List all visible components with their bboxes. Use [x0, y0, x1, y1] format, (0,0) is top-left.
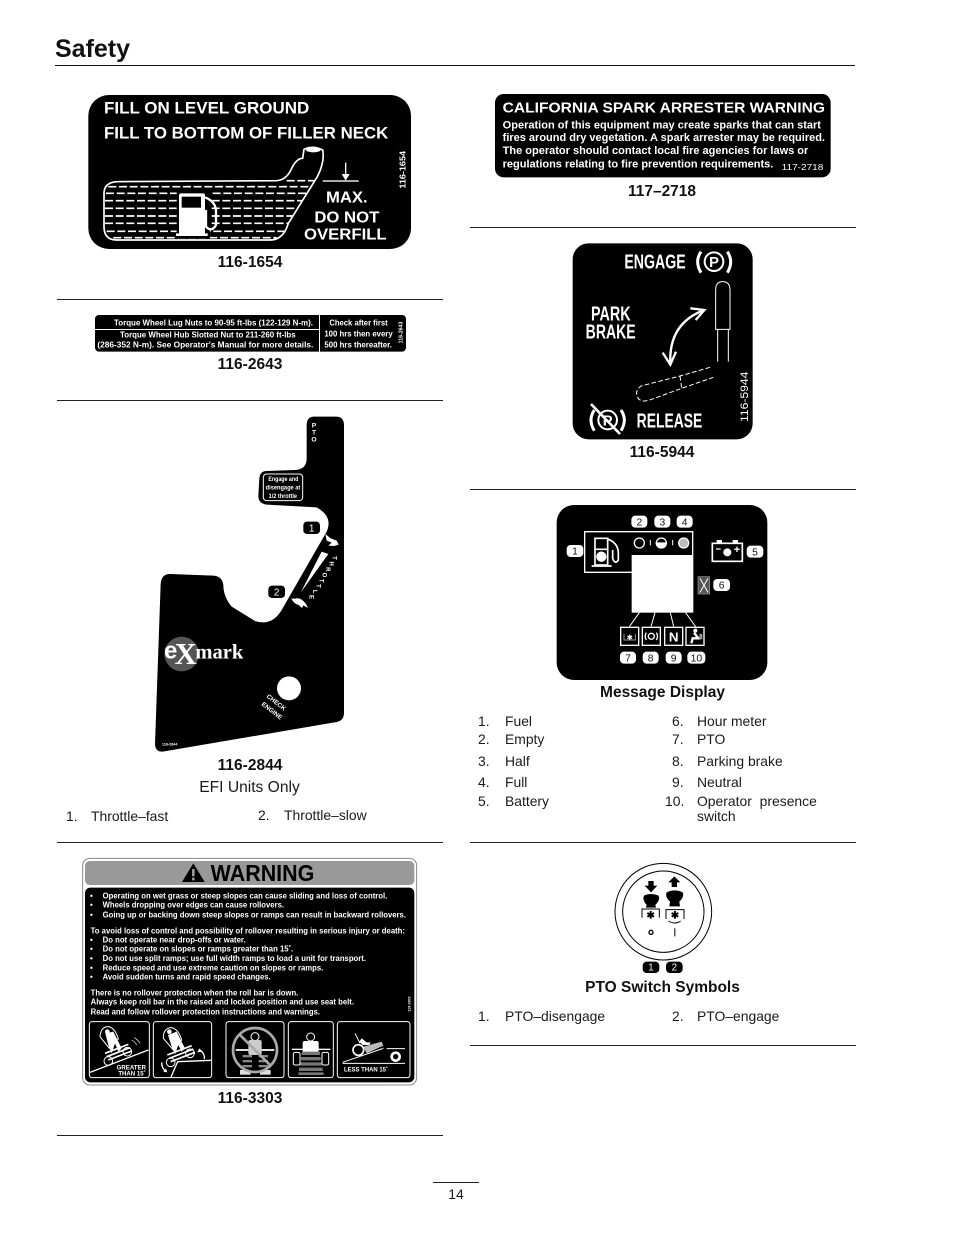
warning text panel: Always keep roll bar in the raised and locked position and use seat belt.	[91, 998, 354, 1007]
icon: fuel pump	[592, 538, 618, 566]
caption: 116-5944	[630, 444, 695, 461]
legend: message display right: Hour meter	[697, 713, 767, 729]
leader lines	[629, 613, 696, 627]
decal: fill on level ground 116-1654: OVERFILL	[304, 226, 387, 243]
logo: exmark: X	[175, 637, 197, 671]
warning text panel: To avoid loss of control and possibility of rollover resulting in serious injury or death:	[91, 926, 405, 935]
icon: parking brake	[642, 627, 660, 645]
decal: park brake 116-5944	[573, 243, 753, 439]
legend: message display right: Operator presence	[697, 793, 817, 809]
legend: message display left: Half	[505, 753, 530, 769]
legend: message display right: 6.	[672, 713, 684, 729]
text: throttle: T	[314, 584, 320, 588]
text: throttle: L	[311, 590, 317, 594]
legend: PTO	[478, 1008, 780, 1024]
decal: california spark arrester 117-2718: fires around dry vegetation. A spark arrester may be required.	[503, 132, 825, 144]
badge 2	[268, 586, 285, 598]
warning text panel: •	[90, 901, 93, 910]
decal: park brake 116-5944: 116-5944	[739, 372, 751, 422]
legend: message display left: Battery	[505, 793, 549, 809]
panel shape	[155, 417, 344, 752]
warning text panel: •	[90, 945, 93, 954]
legend: PTO: 1.	[478, 1008, 490, 1024]
legend: message display right: Parking brake	[697, 753, 783, 769]
decal: fill on level ground 116-1654: MAX.	[326, 190, 368, 207]
warning text panel: Reduce speed and use extreme caution on slopes or ramps.	[103, 963, 323, 972]
icon: parking brake released	[591, 404, 624, 434]
badge numbers: 8	[648, 653, 654, 664]
icon: double arrow	[663, 308, 704, 365]
caption: 116-2643	[218, 356, 283, 373]
warning text panel: 116-3303	[408, 996, 412, 1012]
text: throttle: H	[327, 562, 333, 566]
icon: fuel levels	[634, 538, 689, 548]
decal: california spark arrester 117-2718	[495, 94, 831, 177]
indicator: check engine: ENGINE	[260, 701, 283, 721]
warning text panel: Operating on wet grass or steep slopes can cause sliding and loss of control.	[103, 892, 387, 901]
icon: parking brake engaged	[698, 252, 731, 273]
legend: message display right	[665, 713, 817, 824]
icon: disengage: ✱	[646, 911, 655, 922]
warning text panel: Wheels dropping over edges can cause rollovers.	[103, 901, 284, 910]
legend: message display right: PTO	[697, 731, 725, 747]
icon: throttle wedge	[301, 552, 328, 593]
text: throttle: E	[308, 595, 314, 599]
legend: PTO: PTO–disengage	[505, 1008, 605, 1024]
decal: california spark arrester 117-2718: CALIFORNIA SPARK ARRESTER WARNING	[503, 101, 825, 117]
warning text panel: •	[90, 910, 93, 919]
badge numbers: 3	[659, 517, 665, 528]
legend: message display left: 5.	[478, 793, 490, 809]
warning text panel: •	[90, 973, 93, 982]
decal: park brake 116-5944: ENGAGE	[624, 251, 686, 273]
icon: brake lever up	[716, 282, 730, 362]
decal: fill on level ground 116-1654	[88, 95, 411, 249]
badge 1: 1	[648, 963, 654, 974]
text: throttle: T	[317, 579, 323, 583]
fuel gauge frame	[585, 532, 693, 572]
icon: operator presence	[686, 627, 704, 645]
legend: message display left	[478, 713, 549, 809]
decal: fill on level ground 116-1654: FILL TO BOTTOM OF FILLER NECK	[104, 124, 389, 143]
decal: fill on level ground 116-1654: FILL ON LEVEL GROUND	[104, 98, 309, 117]
legend: message display left: Full	[505, 774, 527, 790]
caption: 116-2844	[218, 757, 283, 774]
message display panel	[557, 505, 767, 680]
warning text panel: There is no rollover protection when the roll bar is down.	[91, 989, 298, 998]
icon: engage: ✱	[671, 911, 680, 922]
legend: message display right: 7.	[672, 731, 684, 747]
warning text panel: •	[90, 963, 93, 972]
decal: torque wheel 116-2643: (286-352 N-m). See Operator's Manual for more details.	[97, 340, 313, 350]
warning header: WARNING	[211, 860, 314, 886]
warning text panel: Going up or backing down steep slopes or ramps can result in backward rollovers.	[103, 910, 406, 919]
number badges	[567, 516, 763, 664]
pictogram: tipping on steep slope: THAN 15˚	[118, 1071, 146, 1078]
decal: throttle panel 116-2844: 116-2844	[162, 743, 178, 747]
decal: california spark arrester 117-2718: regulations relating to fire prevention requirements.	[503, 158, 773, 170]
note box: engage at half throttle	[263, 474, 303, 501]
pictogram: tipping on steep slope: GREATER	[117, 1065, 147, 1071]
badge numbers: 9	[671, 653, 677, 664]
legend: message display right: 9.	[672, 774, 684, 790]
legend: message display left: 3.	[478, 753, 490, 769]
legend: PTO: 2.	[672, 1008, 684, 1024]
icon: parking brake released: P	[603, 413, 613, 429]
decal: california spark arrester 117-2718: Operation of this equipment may create sparks that can start	[503, 119, 821, 131]
legend: throttle: 2.	[258, 807, 270, 823]
legend: message display left: 1.	[478, 713, 490, 729]
page number: 14	[448, 1186, 464, 1202]
badge numbers: 1	[572, 547, 578, 558]
badge 2: 2	[274, 587, 280, 598]
decal: park brake 116-5944: BRAKE	[586, 321, 636, 343]
legend: PTO: PTO–engage	[697, 1008, 780, 1024]
pictogram: wheels dropping over edge	[153, 1022, 212, 1078]
badge numbers: 7	[625, 653, 631, 664]
decal: park brake 116-5944: PARK	[591, 304, 631, 326]
warning text panel	[85, 888, 414, 1082]
badge 2: 2	[672, 963, 677, 974]
icon: neutral: N	[669, 630, 678, 645]
decal: torque wheel 116-2643: Torque Wheel Hub Slotted Nut to 211-260 ft-lbs	[120, 329, 296, 339]
icon: PTO	[621, 627, 639, 645]
decal: torque wheel 116-2643	[95, 315, 406, 352]
icon: neutral	[665, 627, 683, 645]
page number	[433, 1182, 479, 1202]
text: throttle: O	[321, 573, 327, 578]
badge 1: 1	[309, 524, 315, 535]
badge numbers: 10	[691, 653, 702, 664]
legend: message display left: 4.	[478, 774, 490, 790]
decal: california spark arrester 117-2718: The operator should contact local fire agencies for laws or	[503, 145, 809, 157]
legend: message display left: Empty	[505, 731, 544, 747]
decal: torque wheel 116-2643: Torque Wheel Lug Nuts to 90-95 ft-lbs (122-129 N-m).	[114, 317, 313, 327]
icon: hour meter	[698, 577, 710, 594]
indicator: check engine	[260, 676, 301, 721]
text: throttle: R	[324, 567, 330, 572]
legend: message display right: 8.	[672, 753, 684, 769]
subtitle: EFI Units Only	[199, 779, 300, 796]
LCD screen	[632, 555, 693, 613]
logo: exmark: e	[164, 637, 177, 664]
legend: throttle: Throttle–slow	[284, 807, 368, 823]
badge numbers: 5	[752, 547, 758, 558]
switch rings	[615, 863, 712, 960]
warning text panel: Do not operate near drop-offs or water.	[103, 935, 246, 944]
decal: torque wheel 116-2643: 100 hrs then every	[324, 329, 393, 339]
legend: message display right: 10.	[665, 793, 684, 809]
warning text panel: Do not use split ramps; use full width ramps to load a unit for transport.	[103, 954, 366, 963]
note box: engage at half throttle: disengage at	[266, 484, 301, 491]
badge numbers: 2	[636, 517, 642, 528]
warning text panel: •	[90, 892, 93, 901]
decal: fill on level ground 116-1654: DO NOT	[314, 210, 380, 227]
text: PTO	[311, 422, 317, 444]
legend: throttle: 1.	[66, 808, 78, 824]
icon: max level arrow	[323, 163, 359, 182]
badge numbers	[572, 517, 758, 664]
indicator: check engine: CHECK	[265, 693, 287, 713]
PTO switch symbols	[615, 863, 712, 974]
decal: warning 116-3303	[83, 858, 417, 1085]
decal: california spark arrester 117-2718: 117-2718	[782, 162, 824, 172]
warning header	[85, 860, 414, 886]
text: PTO: T	[312, 429, 316, 436]
caption: PTO Switch Symbols	[585, 979, 740, 996]
pictogram: full width ramp	[288, 1022, 333, 1078]
warning text panel: Avoid sudden turns and rapid speed changes.	[103, 973, 271, 982]
warning text panel: Read and follow rollover protection instructions and warnings.	[91, 1007, 320, 1016]
text: PTO: P	[312, 422, 317, 429]
pictogram: tipping on steep slope	[89, 1022, 149, 1078]
decal: park brake 116-5944: RELEASE	[637, 410, 702, 432]
legend: message display left: 2.	[478, 731, 490, 747]
warning text panel: •	[90, 935, 93, 944]
decal: torque wheel 116-2643: 500 hrs thereafter.	[324, 340, 392, 350]
icon: fuel tank	[104, 147, 323, 240]
pictogram: no split ramps	[226, 1022, 284, 1078]
legend: throttle: Throttle–fast	[91, 808, 168, 824]
icon: battery	[712, 540, 742, 561]
icon: PTO: ✱	[627, 633, 633, 642]
caption: 116-3303	[218, 1090, 283, 1107]
badge 1	[303, 522, 320, 535]
note box: engage at half throttle: 1/2 throttle	[269, 493, 297, 500]
icon: brake lever released	[637, 367, 713, 401]
legend: throttle	[66, 807, 368, 824]
decal: torque wheel 116-2643: 116-2643	[399, 322, 405, 343]
decal: throttle panel 116-2844	[155, 417, 344, 752]
badge numbers: 4	[682, 517, 688, 528]
pictogram: slope less than 15 degrees: LESS THAN 15˚	[344, 1066, 388, 1073]
warning text panel: Do not operate on slopes or ramps greater than 15˚.	[103, 945, 293, 954]
title: Safety	[55, 35, 130, 63]
note box: engage at half throttle: Engage and	[268, 476, 298, 483]
caption: Message Display	[600, 684, 725, 701]
legend: message display right: switch	[697, 808, 736, 824]
icon: turtle	[291, 598, 308, 608]
legend: message display left: Fuel	[505, 713, 532, 729]
icon: parking brake engaged: P	[709, 255, 719, 271]
text: throttle	[308, 556, 337, 599]
caption: 117–2718	[628, 183, 696, 200]
decal: torque wheel 116-2643: Check after first	[329, 317, 388, 327]
text: PTO: O	[311, 437, 317, 444]
caption: 116-1654	[218, 254, 283, 271]
badge numbers: 6	[719, 581, 725, 592]
pictogram: slope less than 15 degrees	[337, 1022, 410, 1078]
logo: exmark: mark	[195, 642, 244, 664]
logo: exmark	[164, 637, 244, 671]
icon: rabbit	[325, 534, 339, 546]
legend: message display right: Neutral	[697, 774, 742, 790]
warning text panel: •	[90, 954, 93, 963]
decal: fill on level ground 116-1654: 116-1654	[399, 150, 408, 189]
text: throttle: T	[331, 556, 337, 560]
